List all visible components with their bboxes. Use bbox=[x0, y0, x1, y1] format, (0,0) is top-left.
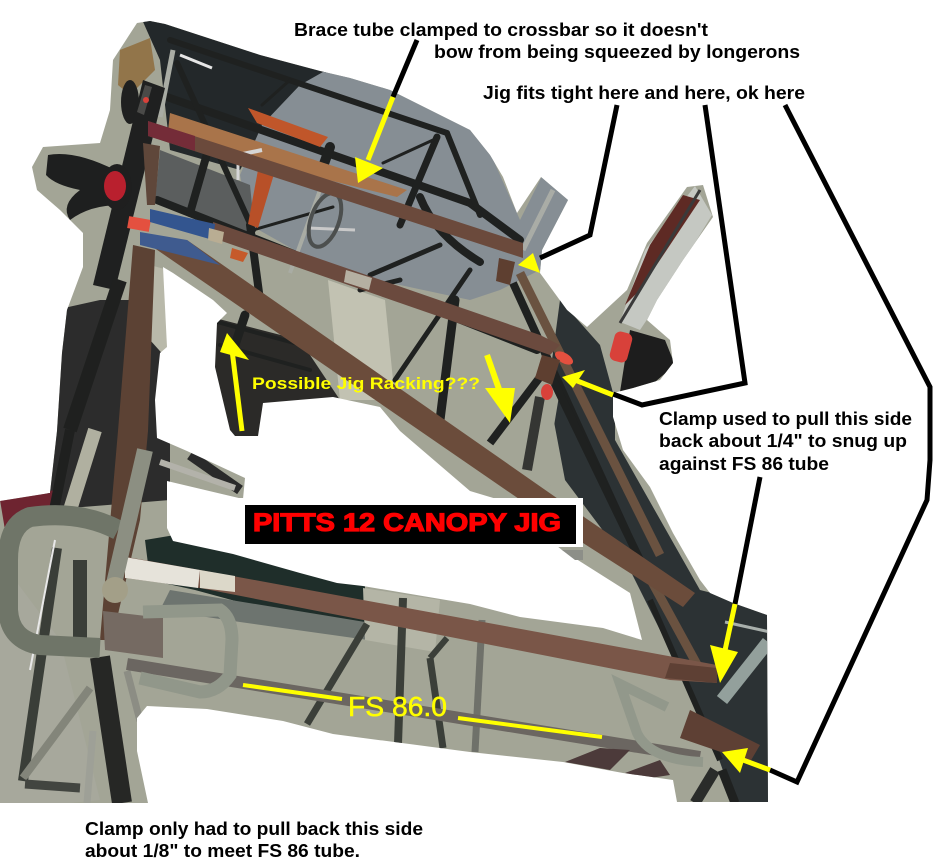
stand post bbox=[523, 190, 553, 250]
grey blanket bbox=[240, 68, 575, 300]
silver panel by left post bbox=[152, 266, 167, 352]
big c-clamp bbox=[8, 515, 118, 648]
note: brace tube bbox=[294, 20, 800, 62]
FS 86.0 tube label: FS 86.0 bbox=[348, 691, 447, 722]
diagonal brown bar bbox=[150, 240, 695, 607]
right clamp arm bbox=[620, 186, 712, 330]
quick-grip bar left bbox=[93, 80, 165, 290]
orange strap bbox=[248, 170, 274, 228]
dark garage panel bbox=[140, 15, 330, 170]
note: clamp 1/8 inch bbox=[85, 819, 423, 861]
dark blob at left of centre bbox=[210, 318, 340, 440]
arrow: jig fits tight, first point bbox=[518, 105, 617, 273]
end block bar two bbox=[535, 355, 560, 385]
arrow: jig fits tight, second point bbox=[562, 105, 745, 405]
dark wheel bbox=[121, 80, 139, 124]
grey panel behind FS tube bbox=[363, 588, 440, 652]
wicker basket bbox=[118, 38, 155, 89]
bow clamp arc bbox=[420, 197, 480, 262]
label: possible jig racking: Possible Jig Racking??? bbox=[252, 374, 480, 393]
lower tubes behind FS 86 bbox=[307, 598, 482, 752]
FS 86 tube bbox=[127, 664, 700, 757]
concrete floor background bbox=[0, 0, 780, 810]
note: brace tube: Brace tube clamped to crossbar so it doesn't bbox=[294, 20, 708, 40]
white panel under frame bbox=[328, 280, 395, 400]
orange plank bbox=[248, 108, 328, 147]
white cut-out region bbox=[155, 267, 642, 640]
concrete, lower bay bbox=[0, 560, 100, 810]
left clamp red trigger bbox=[108, 164, 122, 208]
small c-clamp left bbox=[140, 610, 232, 692]
arrow: racking, upward bbox=[220, 333, 249, 431]
bottom magenta tube shadows bbox=[565, 748, 630, 770]
photo: canopy jig on fuselage frame bbox=[0, 0, 780, 810]
upper tubes bbox=[157, 40, 537, 420]
brown bar one bbox=[148, 121, 523, 258]
clamp blocks bbox=[103, 611, 163, 658]
note: clamp 1/8 inch: about 1/8" to meet FS 86 tube. bbox=[85, 841, 360, 861]
note: clamp 1/4 inch: back about 1/4" to snug up bbox=[659, 431, 907, 451]
big clamp screw bbox=[113, 450, 145, 588]
post upper bbox=[143, 143, 160, 205]
right rails bbox=[490, 273, 735, 803]
silver pin bottom right bbox=[722, 642, 768, 700]
dark under-frame shadow bbox=[155, 150, 255, 235]
FS 86.0 tube label bbox=[243, 685, 602, 737]
left vertical post bbox=[100, 245, 155, 640]
note: clamp 1/4 inch: against FS 86 tube bbox=[659, 454, 829, 474]
lower left dark floor area bbox=[45, 300, 170, 510]
note: brace tube: bow from being squeezed by longerons bbox=[434, 42, 800, 62]
red floor streak bbox=[0, 490, 53, 528]
note: clamp 1/8 inch: Clamp only had to pull back this side bbox=[85, 819, 423, 839]
clamp handle screw and wheel bbox=[306, 194, 344, 249]
arrow: brace tube pointer bbox=[355, 40, 417, 183]
small c-clamp right bbox=[620, 684, 703, 762]
right dark region bbox=[548, 300, 780, 810]
arrow: clamp pulling side bbox=[710, 477, 760, 683]
note: clamp 1/4 inch bbox=[659, 409, 912, 474]
lower brown bar bbox=[125, 557, 717, 683]
right clamp red trigger bbox=[610, 332, 632, 362]
arrow: ok here, third point bbox=[722, 105, 930, 782]
dark band under lower bar bbox=[145, 535, 365, 625]
title plate: PITTS 12 CANOPY JIG bbox=[253, 509, 561, 537]
red clamp pads bbox=[555, 351, 573, 365]
end block bar one bbox=[496, 258, 515, 285]
right clamp black handle bbox=[620, 330, 675, 392]
left clamp black handle bbox=[46, 154, 110, 220]
wood plank bbox=[167, 113, 407, 197]
brown bar two bbox=[213, 222, 560, 355]
arrow: racking, downward bbox=[485, 355, 515, 423]
note: clamp 1/4 inch: Clamp used to pull this side bbox=[659, 409, 912, 429]
note: jig fits tight: Jig fits tight here and here, ok here bbox=[483, 83, 805, 103]
left lower tubes bbox=[23, 280, 240, 803]
threaded rods bbox=[160, 50, 355, 273]
title plate bbox=[238, 498, 583, 547]
